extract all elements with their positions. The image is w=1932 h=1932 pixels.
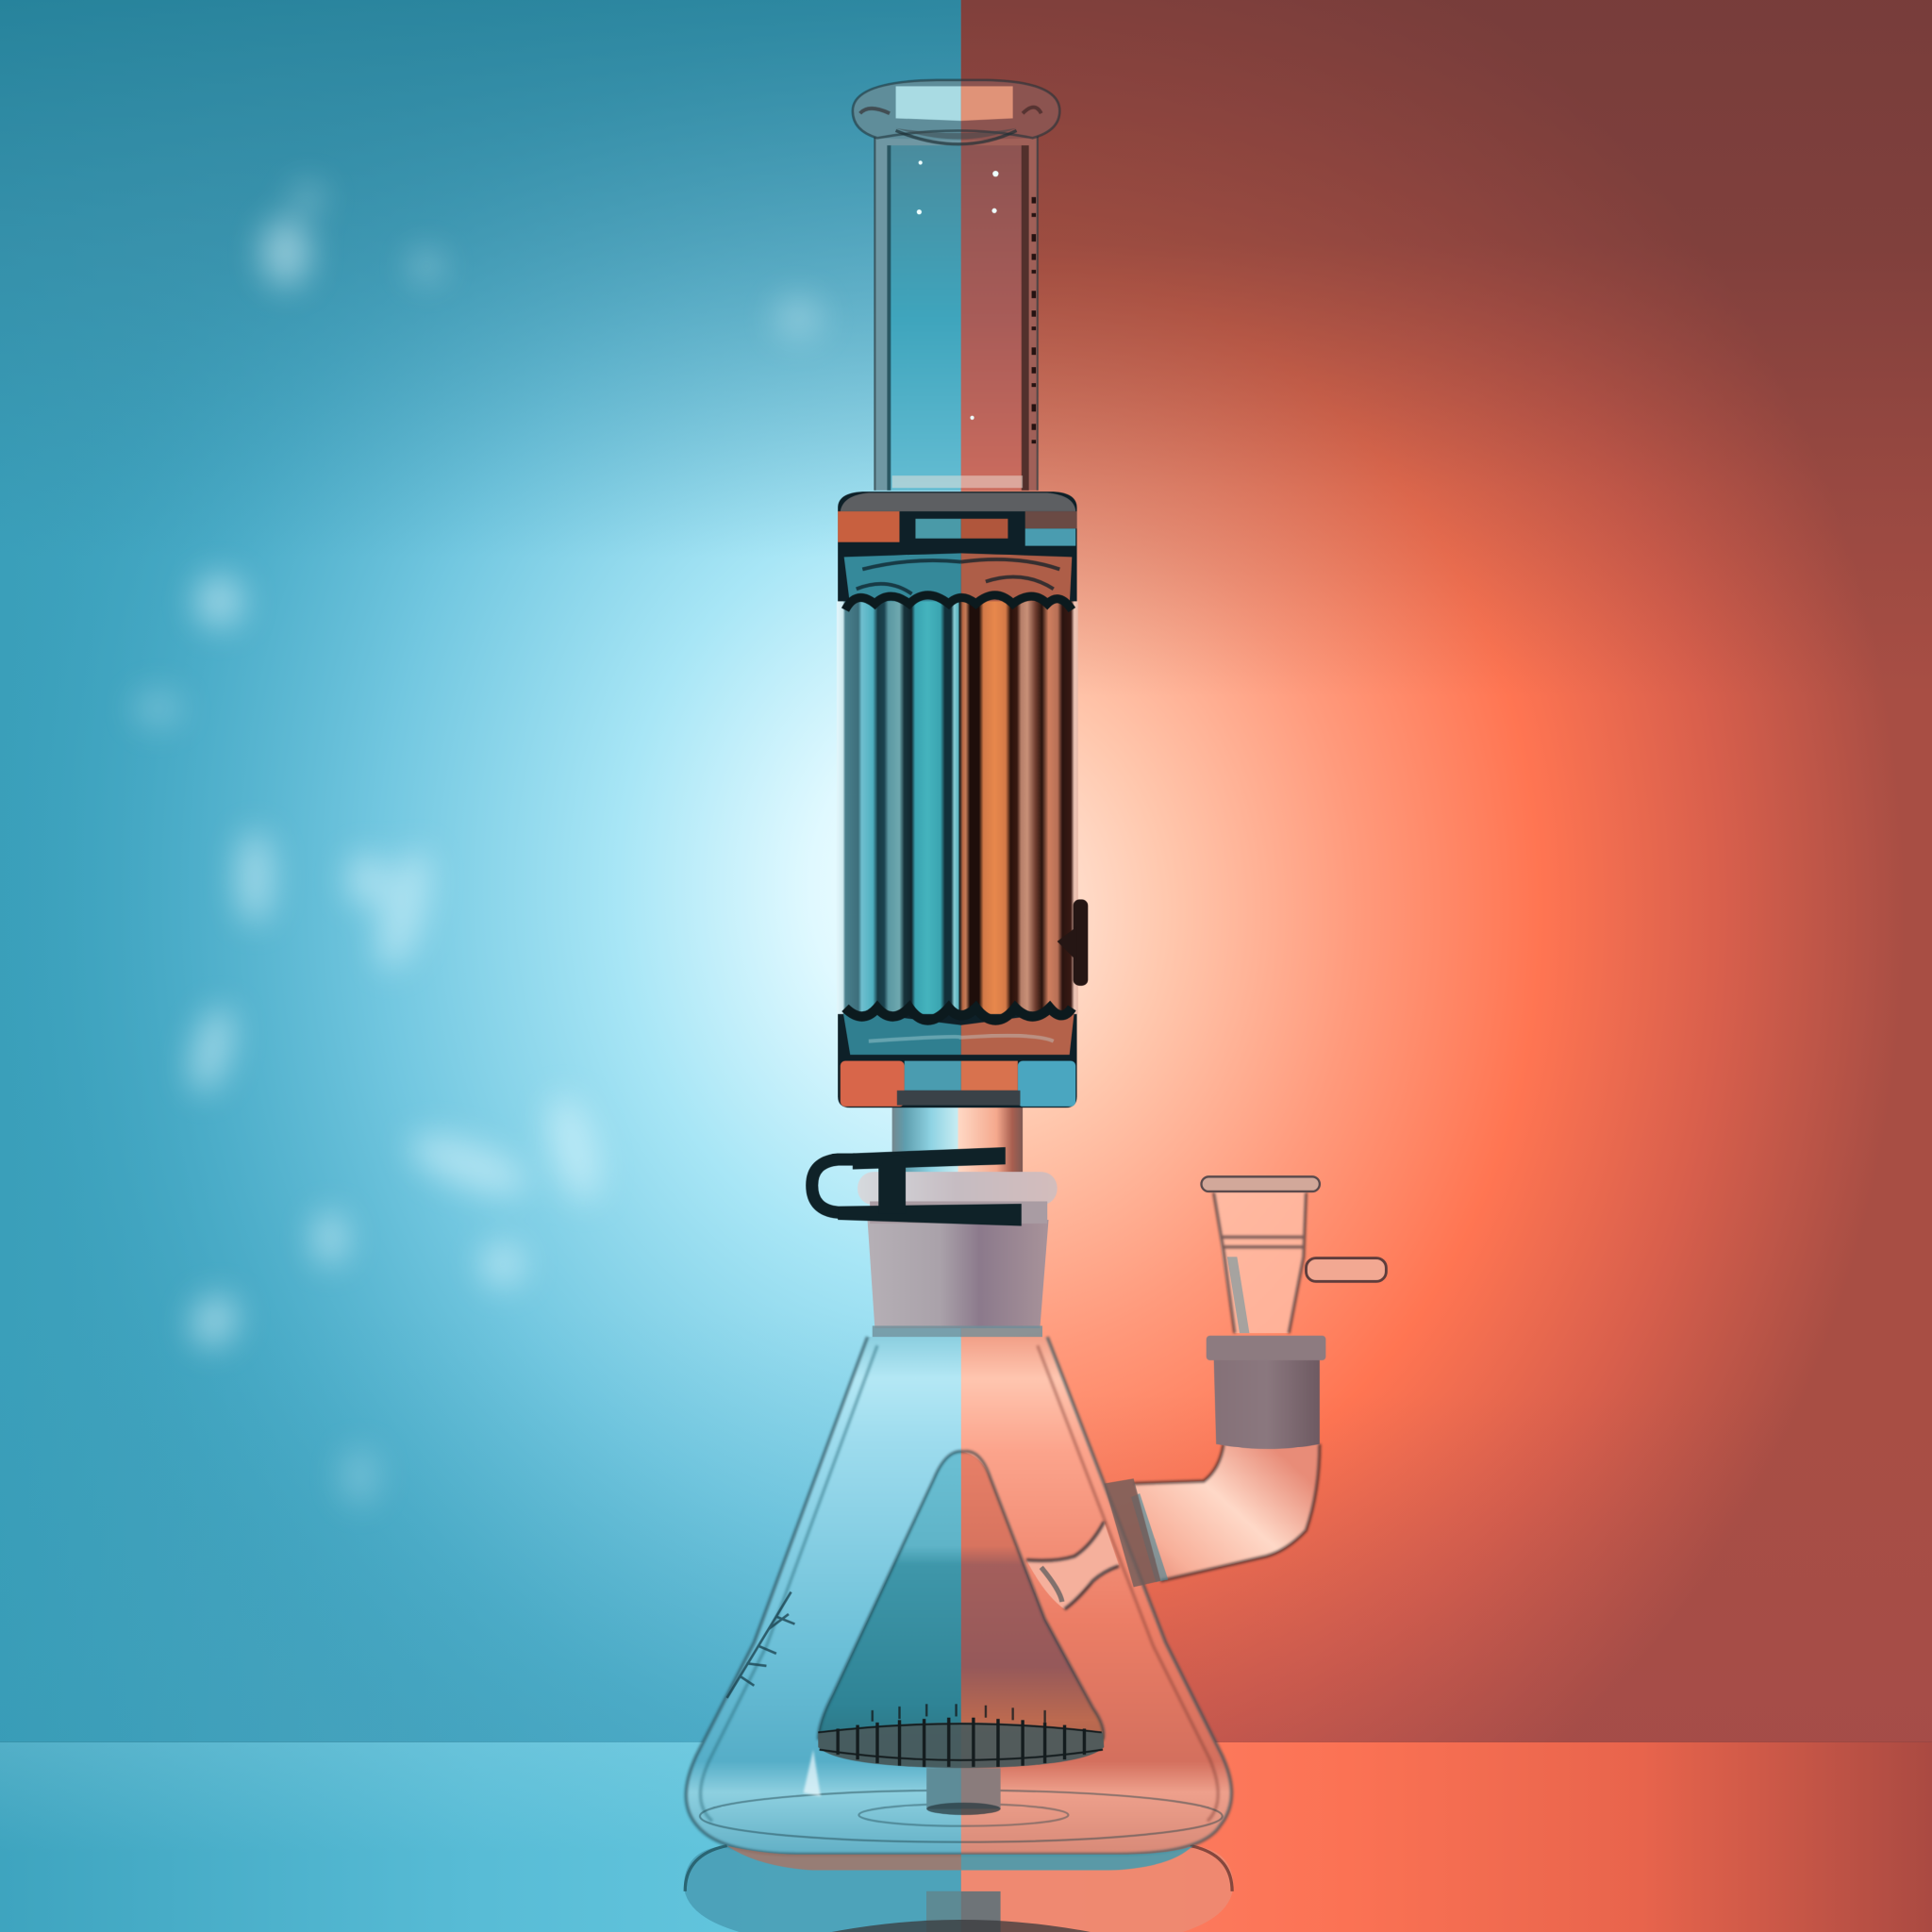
side black grommet [1058, 899, 1088, 986]
collar top band [841, 492, 1075, 511]
frosted female joint [1214, 1356, 1320, 1449]
blue refraction on elbow [1131, 1493, 1168, 1582]
chamber bottom dome [842, 1010, 961, 1055]
chamber frame [838, 491, 1077, 1108]
keck clip [812, 1147, 1022, 1226]
collar coloured bands [838, 511, 899, 542]
main tube [874, 133, 1038, 491]
beaker body red half [960, 1337, 1232, 1855]
beaker water line [700, 1790, 1223, 1842]
mouthpiece lip [853, 80, 1059, 144]
white smear on glass [804, 1750, 821, 1796]
background: blue side [0, 0, 961, 1742]
beaker outline [686, 1337, 1232, 1855]
arm connector [1026, 1522, 1119, 1609]
etched logo on beaker [727, 1592, 794, 1698]
percolator arm stripes [837, 601, 1078, 1014]
inverted base band [727, 1846, 961, 1871]
percolator chamber [837, 491, 1078, 1108]
arm top caps [845, 595, 1072, 610]
ground rim [858, 1172, 1058, 1224]
frosted beaker neck joint [868, 1220, 1049, 1337]
beaker body blue half [686, 1337, 961, 1855]
ring seal [1104, 1478, 1160, 1587]
bokeh light spots [133, 182, 823, 1506]
bowl handle [1306, 1258, 1386, 1281]
reflection of beaker on table [684, 1846, 1233, 1932]
beaker base [686, 1337, 1232, 1871]
glass bubbles [917, 160, 998, 420]
percolator cone [818, 1451, 1105, 1815]
arm bottom caps [845, 1008, 1072, 1020]
bowl piece [1214, 1191, 1306, 1333]
table surface [0, 1742, 1932, 1932]
cone slits [818, 1723, 1104, 1768]
chamber top dome [844, 553, 961, 607]
downstem glass [1134, 1444, 1320, 1581]
etched marks on tube [1032, 197, 1036, 456]
lower neck [892, 1107, 1023, 1173]
foot [841, 1061, 905, 1107]
side arm joint [1026, 1176, 1386, 1609]
cone stem [926, 1768, 1001, 1808]
background: red side [961, 0, 1932, 1742]
